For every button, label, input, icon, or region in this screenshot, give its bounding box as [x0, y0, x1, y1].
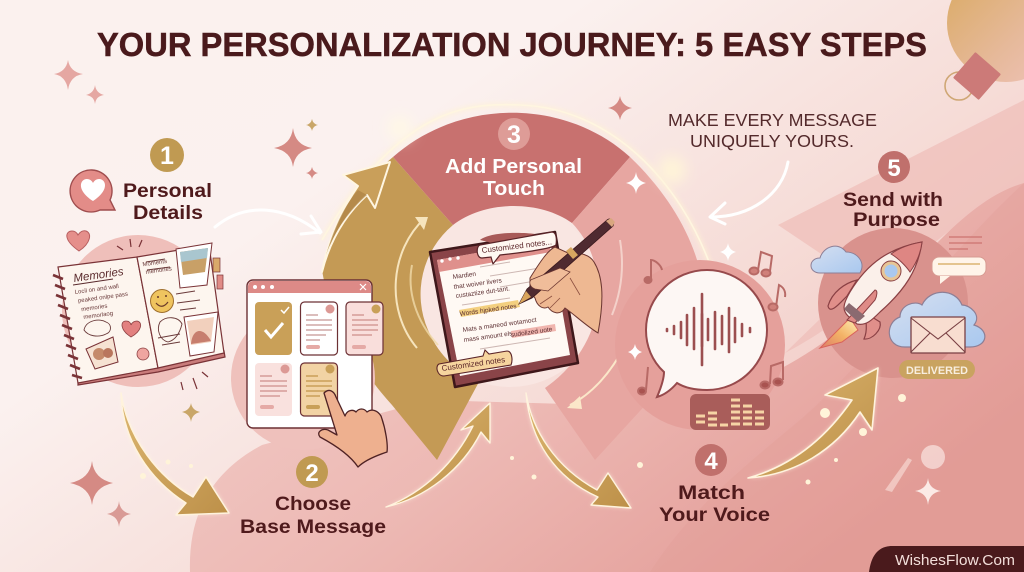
icon: small cloud	[811, 246, 862, 273]
step 1 heading: Personal	[123, 180, 212, 202]
icon: message bubble	[932, 257, 986, 284]
step 3 heading: Add Personal	[445, 156, 582, 178]
badge 5: 5	[887, 155, 901, 182]
sector: rose	[393, 113, 630, 225]
watermark: WishesFlow.Com	[895, 552, 1015, 569]
gold arrow 2 to 3	[386, 403, 490, 507]
illustration: tablet and pen: Mats a maneod wotamoct	[462, 317, 537, 334]
callout: customized notes bottom	[437, 350, 512, 376]
icon: hand holding pen	[519, 218, 615, 333]
illustration: open memory book	[53, 231, 225, 390]
icon: flame	[820, 318, 858, 348]
icon: small heart	[67, 231, 90, 251]
polaroid top	[176, 243, 212, 288]
delivered badge	[899, 360, 975, 379]
badge 4: 4	[704, 448, 718, 475]
illustration: template selection window	[231, 280, 387, 467]
badge 2: 2	[305, 460, 319, 487]
illustration: rocket launch	[811, 228, 986, 379]
illustration: tablet and pen: Words hjpked notes	[459, 303, 518, 318]
illustration: open memory book: Locil on and wall	[74, 284, 119, 296]
sticky photo	[86, 337, 118, 369]
step 2 heading: Base Message	[240, 516, 386, 538]
step 4 heading	[659, 444, 770, 526]
illustration: voice speech bubble	[615, 252, 785, 430]
tagline text	[668, 110, 877, 151]
step 1 heading: Details	[133, 202, 203, 224]
sector: inner circle backdrop	[418, 203, 602, 387]
card: white template	[300, 302, 338, 355]
sector: gold	[322, 157, 480, 460]
illustration: open memory book: memorlaog	[83, 311, 114, 321]
illustration: open memory book: memories	[145, 266, 172, 276]
gold arrow 1 to 2	[121, 393, 229, 515]
step 4 heading: Your Voice	[659, 504, 770, 526]
icon: heart speech bubble	[70, 170, 115, 212]
step 3 heading: Touch	[483, 178, 545, 200]
arrow glow halos	[121, 368, 878, 515]
central ring with sectors	[322, 105, 712, 460]
illustration: tablet and pen: custaztize dut-tant.	[455, 285, 510, 300]
step 5 heading	[843, 151, 943, 231]
glowing arcs	[322, 105, 712, 270]
gold arrow 3 to 4	[526, 393, 631, 508]
card: tan template	[300, 363, 338, 416]
step 5 heading: Send with	[843, 189, 943, 211]
decorative corner: circle, square and ring	[945, 0, 1024, 100]
step 3 heading	[445, 118, 582, 200]
illustration: tablet and pen: sudolized uote	[510, 326, 553, 339]
badge 3: 3	[507, 121, 521, 149]
illustration: tablet and pen: mass amount els	[463, 330, 514, 344]
callout: customized notes top	[477, 232, 556, 264]
watermark	[869, 546, 1024, 572]
illustration: open memory book: Moments	[142, 259, 168, 268]
icon: pointing hand	[319, 390, 387, 467]
callout: customized notes top: Customized notes...	[481, 237, 552, 255]
card: pale template	[255, 363, 292, 416]
white arrow from tagline	[710, 162, 788, 224]
illustration: tablet and pen: Mardien	[452, 271, 477, 281]
equalizer	[690, 394, 770, 430]
waveform	[667, 294, 750, 365]
illustration: open memory book: memories	[81, 304, 108, 313]
delivered badge: DELIVERED	[906, 365, 968, 377]
step 4 heading: Match	[678, 482, 745, 504]
white arrow toward step 2	[215, 210, 321, 234]
illustration: tablet and pen	[430, 218, 615, 387]
step 2 heading: Choose	[275, 493, 351, 515]
callout: customized notes bottom: Customized notes	[441, 355, 506, 373]
card: selected gold	[255, 302, 292, 355]
badge 2	[296, 456, 328, 488]
decorative ball and wand	[885, 445, 945, 492]
step 1 heading	[70, 138, 212, 224]
illustration: open memory book: peaked onlpe pass	[78, 292, 128, 305]
sector: pink	[545, 157, 705, 460]
gold arrow 4 to 5	[748, 368, 878, 478]
illustration: open memory book: Memories	[73, 266, 125, 285]
sparkles	[54, 60, 941, 527]
card: pink template	[346, 302, 383, 355]
polaroid bottom	[184, 312, 218, 356]
illustration: tablet and pen: that woiver livers	[453, 277, 503, 291]
big gold arrow into ring	[322, 162, 390, 272]
icon: rocket	[828, 242, 922, 339]
step 2 heading	[240, 456, 386, 538]
badge 1	[150, 138, 184, 172]
tagline text: MAKE EVERY MESSAGE	[668, 110, 877, 130]
glow dots	[140, 394, 906, 484]
music notes	[638, 252, 785, 394]
smiley	[150, 290, 174, 312]
tagline text: UNIQUELY YOURS.	[690, 131, 854, 151]
step 5 heading: Purpose	[853, 209, 940, 231]
title: YOUR PERSONALIZATION JOURNEY: 5 EASY STEPS	[97, 26, 927, 63]
icon: big cloud with envelope	[889, 292, 985, 353]
badge 1: 1	[160, 142, 174, 170]
